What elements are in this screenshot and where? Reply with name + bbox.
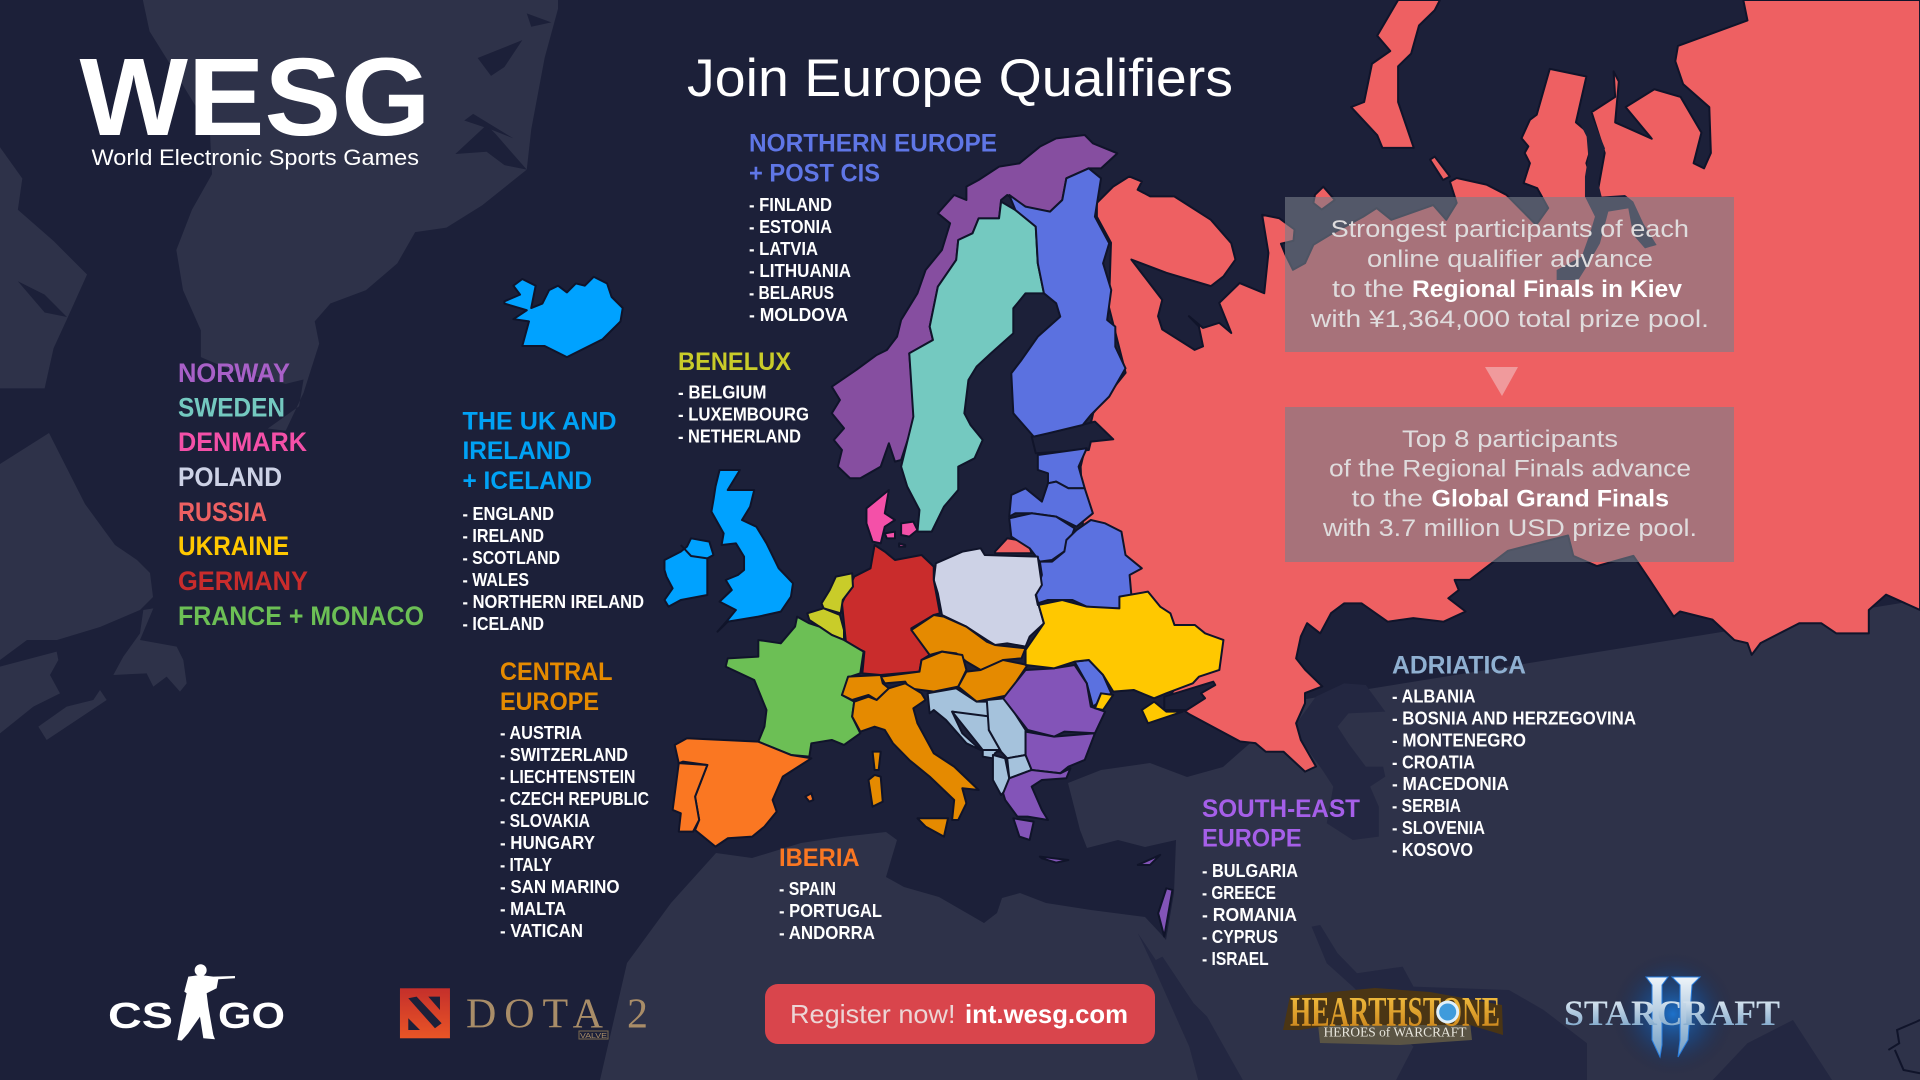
country: Iceland <box>504 277 623 357</box>
text block: Benelux: - LUXEMBOURG <box>678 405 809 425</box>
text block: Adriatica: - CROATIA <box>1392 752 1475 772</box>
text block: Adriatica: ADRIATICA <box>1392 652 1526 680</box>
logo: StarCraft II <box>1564 952 1780 1076</box>
text block: Northern Europe + Post CIS: - ESTONIA <box>749 217 832 237</box>
logo: StarCraft II: STARCRAFT <box>1564 993 1780 1033</box>
text block: Central Europe: - SAN MARINO <box>500 877 620 897</box>
text block: UK and Ireland + Iceland: - NORTHERN IRELAND <box>462 592 644 612</box>
callout: regional finals: Regional Finals in Kiev <box>1412 276 1683 303</box>
country: Sweden <box>901 202 1044 532</box>
button: register: Register now! <box>790 999 956 1029</box>
land: Labrador <box>0 433 153 660</box>
region: Central Europe <box>842 615 1028 837</box>
logo: Dota 2: VALVE <box>580 1033 607 1040</box>
callout: regional finals: to the <box>1332 276 1404 303</box>
land: New Brunswick <box>0 652 60 733</box>
sea: Gulf of Finland <box>1032 422 1113 453</box>
text block: South-East Europe: - ROMANIA <box>1202 905 1297 925</box>
callout: global grand finals: of the Regional Finals advance <box>1329 456 1691 482</box>
text block: Northern Europe + Post CIS: - BELARUS <box>749 283 834 303</box>
text block: Central Europe: EUROPE <box>500 688 599 716</box>
text block: Benelux: - BELGIUM <box>678 383 766 403</box>
country: Poland <box>934 548 1044 647</box>
icon: soldier silhouette <box>177 964 235 1041</box>
region: Adriatica <box>928 688 1032 795</box>
text block: Benelux: BENELUX <box>678 348 791 376</box>
text block: Adriatica: - MONTENEGRO <box>1392 730 1526 750</box>
island: Novaya Zemlya <box>1351 0 1440 148</box>
legend: single-country regions <box>178 358 424 631</box>
Caspian Sea <box>1296 683 1385 840</box>
legend: single-country regions: DENMARK <box>178 427 307 457</box>
inland seas <box>1138 683 1832 1080</box>
logo: WESG: WESG <box>80 36 431 159</box>
text block: UK and Ireland + Iceland: - SCOTLAND <box>462 548 560 568</box>
sea: Ob gulf <box>1557 120 1657 280</box>
island: Vaygach <box>1430 157 1450 180</box>
text block: South-East Europe: EUROPE <box>1202 825 1302 853</box>
country: Germany <box>842 545 940 675</box>
legend: single-country regions: POLAND <box>178 462 282 492</box>
text block: Adriatica: - MACEDONIA <box>1392 774 1509 794</box>
button: register: int.wesg.com <box>965 999 1128 1029</box>
region: Iberia <box>673 738 813 847</box>
text block: Adriatica: - ALBANIA <box>1392 686 1476 706</box>
text block: Central Europe: - VATICAN <box>500 921 583 941</box>
text block: South-East Europe: - CYPRUS <box>1202 927 1278 947</box>
logo: CS:GO: CS <box>108 995 173 1036</box>
text block: UK and Ireland + Iceland: THE UK AND <box>462 408 616 436</box>
arrow: down triangle <box>1485 367 1518 396</box>
text block: UK and Ireland + Iceland: - ICELAND <box>462 614 544 634</box>
legend: single-country regions: UKRAINE <box>178 531 289 561</box>
text block: Central Europe: - CZECH REPUBLIC <box>500 789 649 809</box>
text block: Northern Europe + Post CIS: - LATVIA <box>749 239 818 259</box>
icon: Dota shield <box>400 988 450 1038</box>
text block: South-East Europe: - BULGARIA <box>1202 861 1298 881</box>
callout: global grand finals: Global Grand Finals <box>1432 486 1669 513</box>
text block: Central Europe: - MALTA <box>500 899 566 919</box>
land: Africa and Asia <box>600 600 1920 1080</box>
text block: Central Europe: - AUSTRIA <box>500 723 582 743</box>
country: Finland <box>1009 168 1126 437</box>
region: Northern Europe + Post CIS <box>1009 168 1126 562</box>
text block: Central Europe: - ITALY <box>500 855 552 875</box>
text block: Central Europe <box>500 658 649 941</box>
country: Ukraine <box>1026 592 1223 723</box>
logo: Hearthstone: HEROES of WARCRAFT <box>1324 1026 1467 1041</box>
text block: Central Europe: - SLOVAKIA <box>500 811 590 831</box>
legend: single-country regions: NORWAY <box>178 358 290 388</box>
text block: Northern Europe + Post CIS: - FINLAND <box>749 195 832 215</box>
country: Great Britain <box>711 470 793 632</box>
text block: Iberia: - PORTUGAL <box>779 901 882 921</box>
logo: Hearthstone <box>1283 988 1503 1045</box>
icon: roman numeral II <box>1646 977 1700 1057</box>
text block: Iberia: - ANDORRA <box>779 923 875 943</box>
logo: Dota 2 <box>400 988 648 1040</box>
logo: Hearthstone: HEARTHSTONE <box>1290 990 1500 1036</box>
logo: CS:GO: GO <box>218 995 285 1036</box>
text block: Northern Europe + Post CIS: + POST CIS <box>749 160 880 188</box>
text block: Adriatica: - SLOVENIA <box>1392 818 1485 838</box>
text block: UK and Ireland + Iceland: + ICELAND <box>462 467 592 495</box>
country: Denmark <box>866 490 917 547</box>
map of Europe <box>504 0 1920 937</box>
country: Estonia <box>1038 448 1087 488</box>
country: Norway <box>832 135 1117 478</box>
callout: regional finals: Strongest participants of each <box>1331 216 1689 243</box>
text block: Northern Europe + Post CIS: - LITHUANIA <box>749 261 851 281</box>
text block: Adriatica: - SERBIA <box>1392 796 1461 816</box>
country: France <box>726 617 864 757</box>
country: Lithuania <box>1009 513 1075 562</box>
title: Join Europe Qualifiers <box>687 49 1233 108</box>
text block: Central Europe: - LIECHTENSTEIN <box>500 767 636 787</box>
text block: Central Europe: - HUNGARY <box>500 833 595 853</box>
text block: UK and Ireland + Iceland: - WALES <box>462 570 529 590</box>
land: Greenland <box>143 0 558 431</box>
text block: Northern Europe + Post CIS <box>749 130 997 325</box>
Persian Gulf <box>1312 925 1587 1080</box>
country: Belarus <box>1036 520 1142 608</box>
land: Canadian islands <box>0 147 87 388</box>
icon: swirl <box>1438 1002 1458 1022</box>
callout: regional finals <box>1285 197 1734 352</box>
text block: Adriatica: - BOSNIA AND HERZEGOVINA <box>1392 708 1636 728</box>
sea: Azov <box>1164 682 1215 710</box>
text block: Iberia: - SPAIN <box>779 879 836 899</box>
button: register <box>765 984 1155 1044</box>
logo: Dota 2: DOTA 2 <box>466 992 648 1038</box>
legend: single-country regions: SWEDEN <box>178 392 285 422</box>
text block: Iberia <box>779 844 882 943</box>
country: Moldova <box>1075 660 1111 707</box>
text block: Benelux <box>678 348 809 447</box>
land: Nova Scotia <box>38 690 107 740</box>
region: UK and Ireland <box>664 470 793 632</box>
legend: single-country regions: FRANCE + MONACO <box>178 601 424 631</box>
region: South-East Europe <box>1003 665 1172 937</box>
Arabian Sea <box>1713 1020 1832 1080</box>
callout: global grand finals: with 3.7 million USD prize pool. <box>1322 515 1697 542</box>
text block: Adriatica <box>1392 652 1636 860</box>
text block: Iberia: IBERIA <box>779 844 860 872</box>
island: Ireland <box>664 538 713 607</box>
text block: Central Europe: CENTRAL <box>500 658 612 686</box>
text block: South-East Europe: - GREECE <box>1202 883 1276 903</box>
logo: CS:GO <box>108 964 285 1041</box>
legend: single-country regions: RUSSIA <box>178 497 267 527</box>
region: Benelux <box>807 573 853 640</box>
text block: Northern Europe + Post CIS: - MOLDOVA <box>749 305 848 325</box>
text block: UK and Ireland + Iceland: - ENGLAND <box>462 504 554 524</box>
callout: global grand finals <box>1285 407 1734 562</box>
logo: WESG: World Electronic Sports Games <box>92 145 419 170</box>
text block: UK and Ireland + Iceland <box>462 408 644 634</box>
island: Kolguyev <box>1313 187 1335 210</box>
text block: South-East Europe: - ISRAEL <box>1202 949 1269 969</box>
Red Sea <box>1138 933 1243 1080</box>
land: Newfoundland <box>113 608 187 692</box>
legend: single-country regions: GERMANY <box>178 566 308 596</box>
country: Russia <box>1081 0 1920 772</box>
text block: Adriatica: - KOSOVO <box>1392 840 1473 860</box>
callout: regional finals: online qualifier advance <box>1367 246 1653 273</box>
text block: UK and Ireland + Iceland: - IRELAND <box>462 526 544 546</box>
callout: global grand finals: Top 8 participants <box>1402 426 1618 453</box>
text block: Northern Europe + Post CIS: NORTHERN EUROPE <box>749 130 997 158</box>
text block: South-East Europe <box>1202 795 1360 969</box>
country: Latvia <box>1009 482 1093 527</box>
decorative outline: bottom right <box>1888 1020 1920 1073</box>
fjords and inlets <box>18 13 551 317</box>
text block: Benelux: - NETHERLAND <box>678 427 801 447</box>
callout: global grand finals: to the <box>1352 486 1423 513</box>
text block: Central Europe: - SWITZERLAND <box>500 745 628 765</box>
text block: UK and Ireland + Iceland: IRELAND <box>462 437 571 465</box>
exclave: Kaliningrad <box>995 538 1032 553</box>
callout: regional finals: with ¥1,364,000 total prize pool. <box>1310 306 1709 333</box>
text block: South-East Europe: SOUTH-EAST <box>1202 795 1360 823</box>
